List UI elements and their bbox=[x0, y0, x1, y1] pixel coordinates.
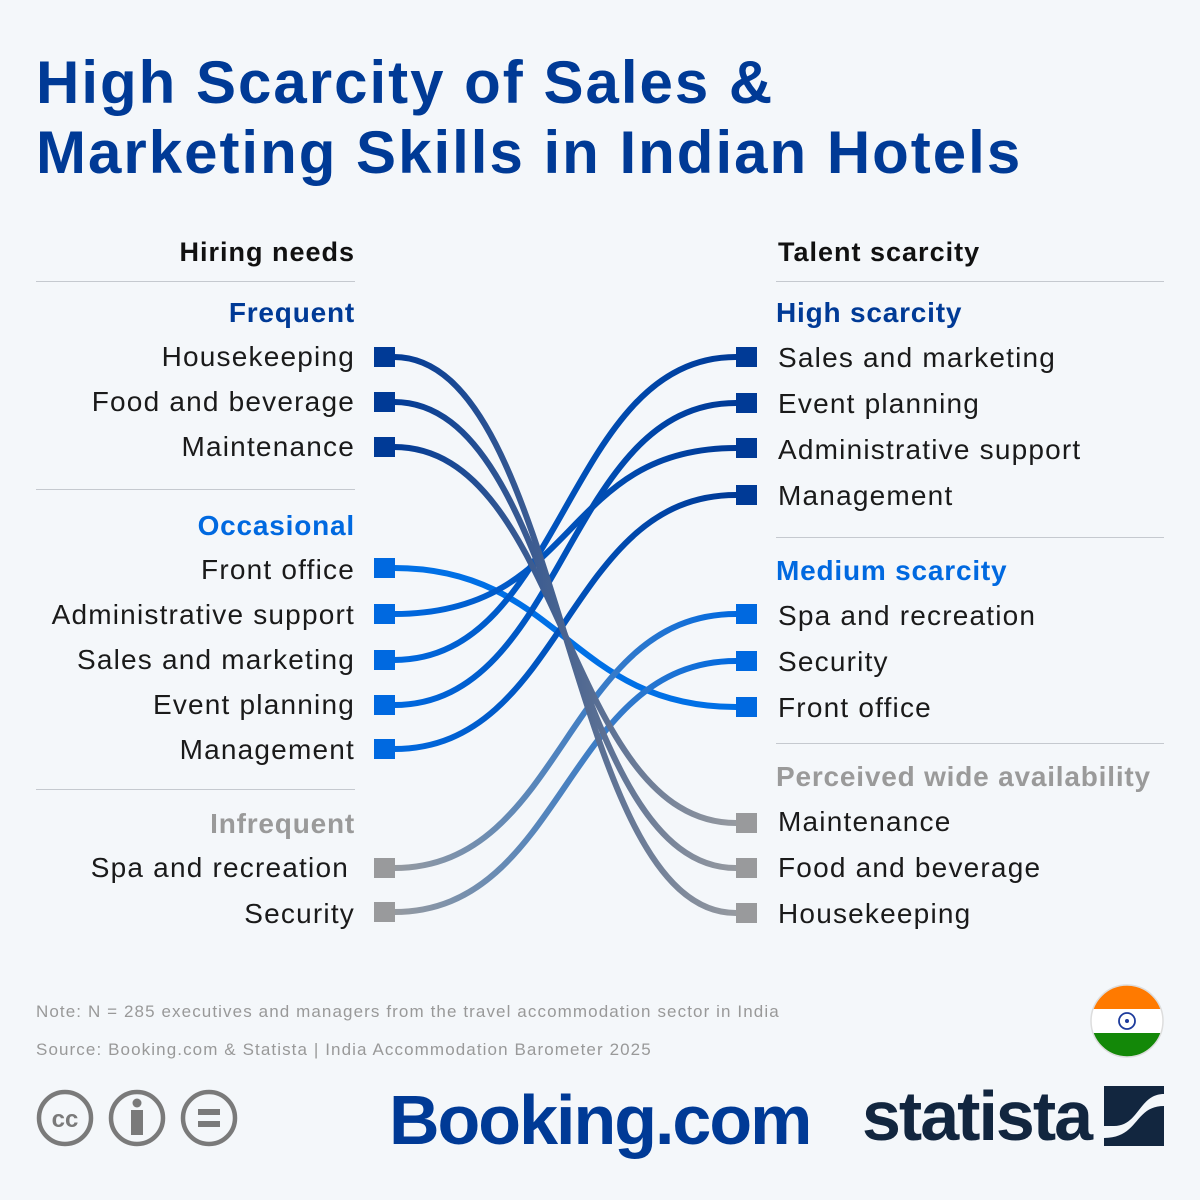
title: Marketing Skills in Indian Hotels bbox=[36, 119, 1022, 186]
line: Food and beverage bbox=[394, 402, 736, 868]
logo: statista: statista bbox=[862, 1077, 1091, 1155]
heading: hiring needs: Hiring needs bbox=[179, 237, 355, 267]
left column labels bbox=[52, 297, 355, 929]
note: Note: N = 285 executives and managers from the travel accommodation sector in India bbox=[36, 1002, 780, 1021]
item: Sales and marketing: Sales and marketing bbox=[778, 342, 1056, 373]
item: Front office: Front office bbox=[201, 554, 355, 585]
line: Spa and recreation bbox=[394, 614, 736, 868]
line: Management bbox=[394, 495, 736, 749]
category: perceived wide availability: Perceived wide availability bbox=[776, 761, 1151, 792]
category: occasional: Occasional bbox=[198, 510, 355, 541]
markers: left bbox=[374, 347, 395, 922]
title: High Scarcity of Sales & bbox=[36, 49, 774, 116]
item: Administrative support: Administrative support bbox=[52, 599, 355, 630]
line: Maintenance bbox=[394, 447, 736, 823]
item: Management: Management bbox=[778, 480, 953, 511]
item: Event planning: Event planning bbox=[778, 388, 980, 419]
item: Maintenance: Maintenance bbox=[778, 806, 952, 837]
line: Administrative support bbox=[394, 448, 736, 614]
icon: creative commons licence: cc bbox=[52, 1106, 78, 1133]
item: Security: Security bbox=[244, 898, 355, 929]
line: Security bbox=[394, 661, 736, 912]
item: Spa and recreation: Spa and recreation bbox=[91, 852, 349, 883]
item: Housekeeping: Housekeeping bbox=[162, 341, 355, 372]
category: infrequent: Infrequent bbox=[210, 808, 355, 839]
item: Management: Management bbox=[180, 734, 355, 765]
item: Event planning: Event planning bbox=[153, 689, 355, 720]
markers: right bbox=[736, 347, 757, 923]
title bbox=[36, 49, 1022, 186]
icon: creative commons licence bbox=[36, 1090, 238, 1146]
category: frequent: Frequent bbox=[229, 297, 355, 328]
item: Housekeeping: Housekeeping bbox=[778, 898, 971, 929]
line: Event planning bbox=[394, 403, 736, 705]
item: Food and beverage: Food and beverage bbox=[778, 852, 1041, 883]
item: Security: Security bbox=[778, 646, 889, 677]
heading: talent scarcity: Talent scarcity bbox=[778, 237, 980, 267]
source: Source: Booking.com & Statista | India Accommodation Barometer 2025 bbox=[36, 1040, 652, 1059]
item: Administrative support: Administrative support bbox=[778, 434, 1081, 465]
item: Spa and recreation: Spa and recreation bbox=[778, 600, 1036, 631]
icon: India flag bbox=[1090, 984, 1164, 1058]
item: Maintenance: Maintenance bbox=[181, 431, 355, 462]
category: high scarcity: High scarcity bbox=[776, 297, 962, 328]
line: Housekeeping bbox=[394, 357, 736, 913]
line: Sales and marketing bbox=[394, 357, 736, 660]
right column labels bbox=[776, 297, 1151, 929]
line: Front office bbox=[394, 568, 736, 707]
logo: Booking.com: Booking.com bbox=[389, 1081, 810, 1159]
item: Front office: Front office bbox=[778, 692, 932, 723]
item: Sales and marketing: Sales and marketing bbox=[77, 644, 355, 675]
item: Food and beverage: Food and beverage bbox=[92, 386, 355, 417]
category: medium scarcity: Medium scarcity bbox=[776, 555, 1007, 586]
